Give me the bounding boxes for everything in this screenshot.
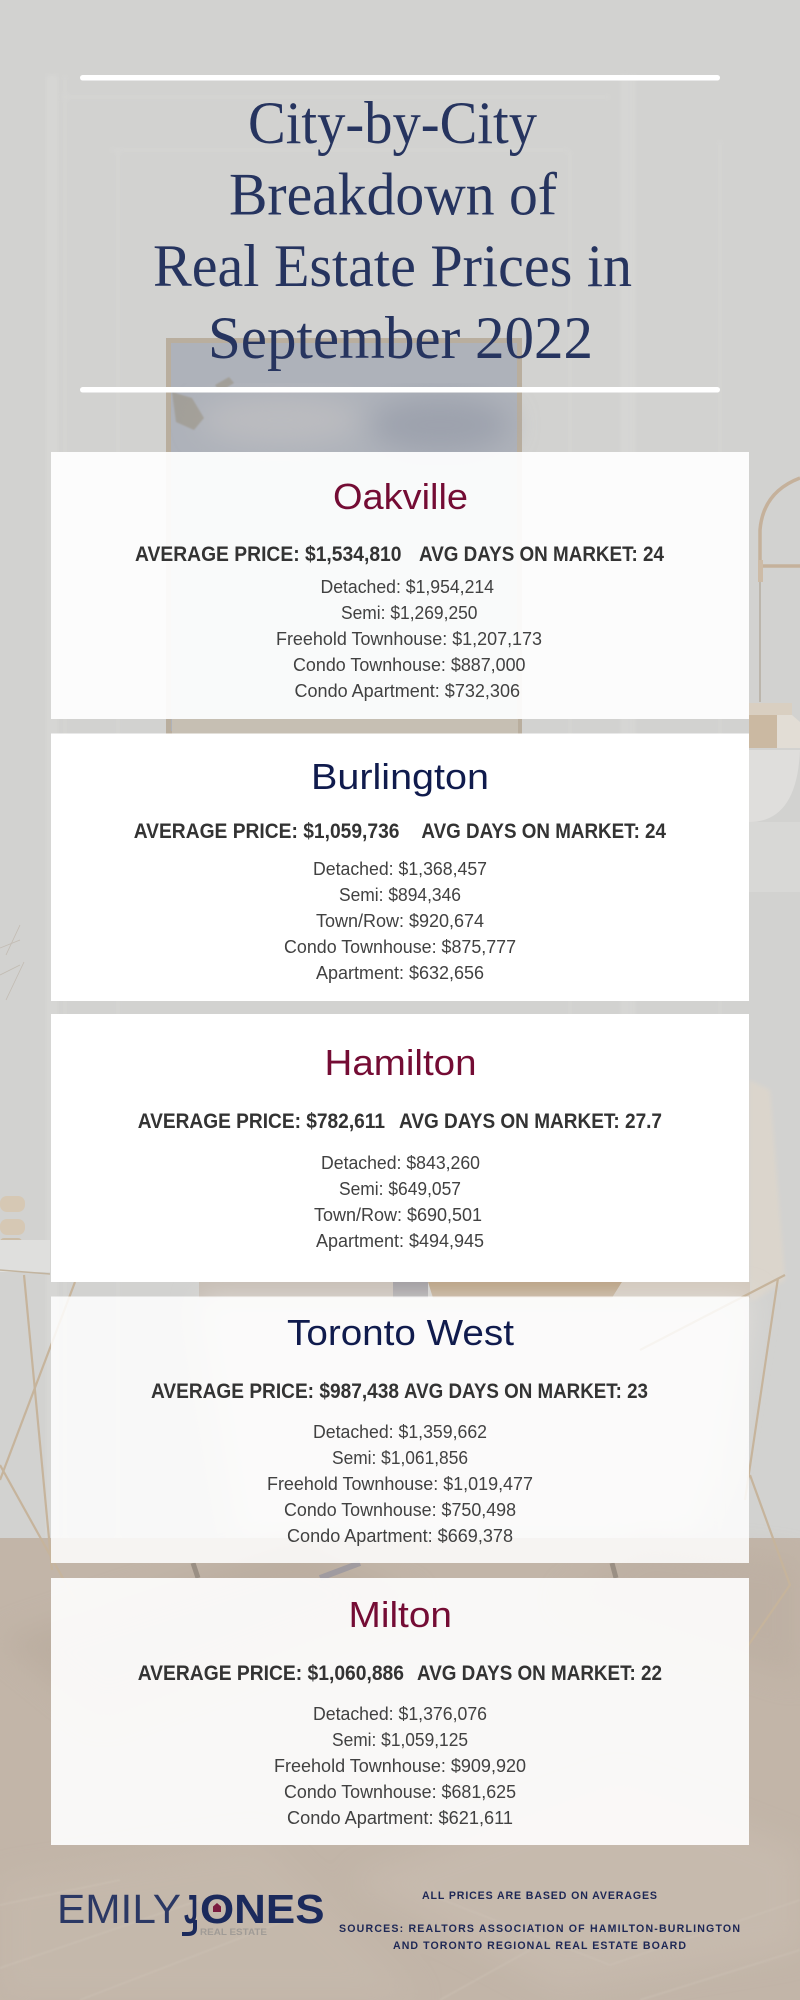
heading: Milton: Milton [348,1594,452,1635]
price list: Hamilton: Town/Row: $690,501 [314,1205,482,1225]
price list: Toronto West: Freehold Townhouse: $1,019,477 [267,1474,533,1494]
price list: Burlington: Apartment: $632,656 [316,963,484,983]
heading: Hamilton: Hamilton [324,1042,476,1083]
price list: Oakville: Freehold Townhouse: $1,207,173 [276,629,542,649]
price list: Milton: Detached: $1,376,076 [313,1704,487,1724]
stats: Milton: AVG DAYS ON MARKET: 22 [417,1662,662,1685]
footnote and sources: ALL PRICES ARE BASED ON AVERAGES [422,1890,657,1902]
price list: Oakville [276,577,542,701]
price list: Milton: Condo Townhouse: $681,625 [284,1782,516,1802]
panel: Toronto West [51,1296,749,1563]
price list: Burlington: Semi: $894,346 [339,885,461,905]
title [153,90,632,371]
logo: Emily Jones Real Estate: EMILY [57,1886,181,1932]
price list: Oakville: Condo Apartment: $732,306 [294,681,520,701]
heading: Burlington: Burlington [311,756,489,797]
bottom rule [80,387,720,392]
price list: Hamilton: Apartment: $494,945 [316,1231,484,1251]
logo: Emily Jones Real Estate [57,1886,324,1937]
top rule [80,75,720,80]
heading: Toronto West: Toronto West [287,1312,514,1353]
side table and stones [0,1196,25,1212]
price list: Hamilton: Detached: $843,260 [321,1153,480,1173]
stats: Burlington [134,820,666,843]
stats: Toronto West: AVERAGE PRICE: $987,438 [151,1380,399,1403]
dried branch [0,925,24,1000]
price list: Oakville: Detached: $1,954,214 [320,577,494,597]
logo: Emily Jones Real Estate: J [184,1886,198,1932]
stats: Toronto West: AVG DAYS ON MARKET: 23 [404,1380,648,1403]
stats: Oakville: AVG DAYS ON MARKET: 24 [419,543,664,566]
price list: Toronto West: Condo Townhouse: $750,498 [284,1500,516,1520]
price list: Milton: Freehold Townhouse: $909,920 [274,1756,526,1776]
price list: Toronto West: Semi: $1,061,856 [332,1448,468,1468]
floor [0,1538,800,2000]
price list: Toronto West: Condo Apartment: $669,378 [287,1526,513,1546]
price list: Milton: Semi: $1,059,125 [332,1730,468,1750]
price list: Burlington: Town/Row: $920,674 [316,911,484,931]
price list: Milton [274,1704,526,1828]
stats: Hamilton: AVG DAYS ON MARKET: 27.7 [399,1110,662,1133]
stats: Hamilton: AVERAGE PRICE: $782,611 [138,1110,385,1133]
price list: Oakville: Condo Townhouse: $887,000 [293,655,526,675]
title: Real Estate Prices in [153,233,632,299]
title: City-by-City [248,90,537,156]
price list: Burlington [284,859,516,983]
stats: Hamilton [138,1110,662,1133]
price list: Oakville: Semi: $1,269,250 [341,603,478,623]
stats: Milton [138,1662,662,1685]
price list: Burlington: Condo Townhouse: $875,777 [284,937,516,957]
price list: Milton: Condo Apartment: $621,611 [287,1808,513,1828]
stats: Oakville [135,543,664,566]
footnote and sources: SOURCES: REALTORS ASSOCIATION OF HAMILTON-BURLINGTON [339,1923,740,1935]
heading: Oakville: Oakville [333,476,468,517]
stats: Oakville: AVERAGE PRICE: $1,534,810 [135,543,402,566]
logo: Emily Jones Real Estate: REAL ESTATE [200,1927,267,1937]
panel: Burlington [51,734,749,1001]
price list: Hamilton [314,1153,484,1251]
footnote and sources [339,1890,740,1952]
stats: Burlington: AVERAGE PRICE: $1,059,736 [134,820,399,843]
armchair [749,1080,785,1300]
painting [166,338,522,734]
panel: Hamilton [51,1014,749,1282]
panel: Milton [51,1578,749,1845]
icon: house in logo [213,1903,221,1912]
stats: Toronto West [151,1380,648,1403]
price list: Burlington: Detached: $1,368,457 [313,859,487,879]
logo: Emily Jones Real Estate: ONES [200,1886,324,1932]
stats: Milton: AVERAGE PRICE: $1,060,886 [138,1662,404,1685]
chair and table legs [0,1275,790,1650]
title: September 2022 [208,305,593,371]
pendant lamp [760,478,800,562]
price list: Hamilton: Semi: $649,057 [339,1179,461,1199]
price list: Toronto West [267,1422,533,1546]
price list: Toronto West: Detached: $1,359,662 [313,1422,487,1442]
stats: Burlington: AVG DAYS ON MARKET: 24 [421,820,666,843]
panel: Oakville [51,452,749,719]
footnote and sources: AND TORONTO REGIONAL REAL ESTATE BOARD [393,1940,686,1952]
title: Breakdown of [229,162,557,228]
